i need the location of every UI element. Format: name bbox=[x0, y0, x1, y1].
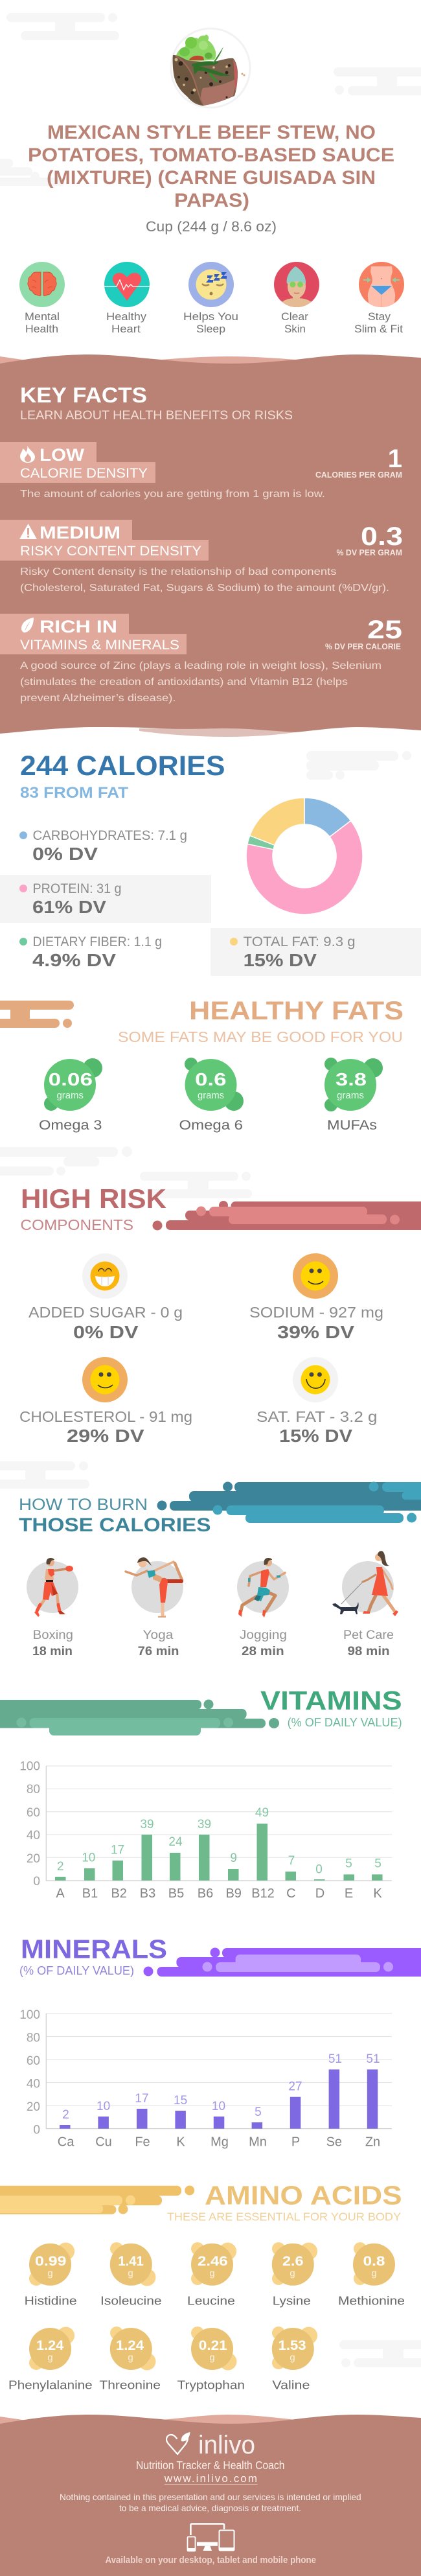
title: POTATOES, TOMATO-BASED SAUCE bbox=[28, 145, 394, 166]
benefit labels: Helps You bbox=[183, 310, 238, 323]
amino: tryptophan: g bbox=[209, 2352, 215, 2363]
bar chart: vitamins: 24 bbox=[168, 1835, 183, 1849]
benefit labels: Sleep bbox=[196, 323, 225, 335]
macro: protein: PROTEIN: 31 g bbox=[32, 881, 122, 896]
risk: saturated fat bbox=[256, 1357, 377, 1446]
minerals subheading: (% OF DAILY VALUE) bbox=[19, 1964, 134, 1977]
activity: pet care bbox=[332, 1551, 398, 1658]
bar chart: minerals: P bbox=[291, 2135, 300, 2150]
risk: saturated fat: 15% DV bbox=[279, 1426, 352, 1446]
activity: jogging: Jogging bbox=[240, 1629, 287, 1642]
amino: threonine: 1.24 bbox=[116, 2338, 144, 2353]
fat: omega 6: 0.6 bbox=[195, 1069, 227, 1089]
fat: omega 3: 0.06 bbox=[49, 1069, 93, 1089]
title: (MIXTURE) (CARNE GUISADA SIN bbox=[47, 167, 376, 189]
bar chart: vitamins: 2 bbox=[57, 1860, 64, 1874]
bar chart: minerals: 5 bbox=[255, 2106, 262, 2119]
risk: sodium: SODIUM - 927 mg bbox=[249, 1304, 383, 1321]
healthy fats heading: HEALTHY FATS bbox=[189, 997, 404, 1025]
serving size: Cup (244 g / 8.6 oz) bbox=[146, 218, 277, 235]
fact: rich in vitamins and minerals: A good source of Zinc (plays a leading role in weight loss), Selenium bbox=[20, 660, 381, 671]
bar chart: minerals: Zn bbox=[365, 2135, 380, 2150]
icon: devices bbox=[187, 2524, 234, 2551]
amino: threonine: Threonine bbox=[99, 2378, 161, 2392]
minerals heading: MINERALS bbox=[21, 1934, 167, 1964]
icon: sleep bbox=[188, 262, 234, 307]
amino acids subheading: THESE ARE ESSENTIAL FOR YOUR BODY bbox=[167, 2210, 401, 2223]
availability note: Available on your desktop, tablet and mobile phone bbox=[105, 2555, 316, 2566]
fact: risky content density: 0.3 bbox=[361, 522, 403, 551]
amino: leucine: 2.46 bbox=[198, 2254, 228, 2269]
benefit labels: Healthy bbox=[106, 310, 147, 323]
fact: risky content density: Risky Content density is the relationship of bad components bbox=[20, 566, 337, 577]
amino: valine: Valine bbox=[272, 2378, 310, 2392]
icon: slim and fit bbox=[359, 262, 404, 308]
activity: yoga: 76 min bbox=[138, 1645, 179, 1658]
vitamins heading: VITAMINS bbox=[260, 1686, 402, 1715]
activity: pet care: Pet Care bbox=[343, 1629, 394, 1642]
fact: rich in vitamins and minerals: RICH IN bbox=[40, 617, 117, 636]
fat: mufas: MUFAs bbox=[327, 1118, 377, 1133]
bar chart: vitamins: 5 bbox=[345, 1857, 352, 1871]
amino: valine: 1.53 bbox=[279, 2338, 306, 2353]
healthy fats subheading: SOME FATS MAY BE GOOD FOR YOU bbox=[118, 1028, 403, 1045]
risk: added sugar bbox=[28, 1253, 183, 1342]
amino: threonine: g bbox=[128, 2352, 133, 2363]
food photo: beef stew bbox=[171, 29, 250, 108]
bar chart: vitamins: B1 bbox=[82, 1886, 98, 1901]
fat: omega 3: grams bbox=[57, 1090, 84, 1101]
amino: valine: g bbox=[290, 2352, 295, 2363]
bar chart: vitamins: E bbox=[345, 1886, 353, 1901]
high risk decoration bbox=[153, 1201, 421, 1230]
bar chart: vitamins: C bbox=[286, 1886, 296, 1901]
bar chart: vitamins: B12 bbox=[251, 1886, 275, 1901]
bar chart: vitamins: D bbox=[315, 1886, 324, 1901]
benefit labels: Skin bbox=[284, 323, 306, 335]
macro: dietary fiber: 4.9% DV bbox=[32, 950, 116, 970]
macro: carbohydrates bbox=[19, 828, 187, 864]
macro: protein bbox=[0, 875, 211, 923]
disclaimer: to be a medical advice, diagnosis or treatment. bbox=[119, 2503, 301, 2513]
panel: footer bbox=[0, 2415, 421, 2576]
amino: phenylalanine: g bbox=[47, 2352, 53, 2363]
amino: leucine: Leucine bbox=[187, 2294, 235, 2308]
amino: tryptophan: Tryptophan bbox=[177, 2378, 245, 2392]
amino: histidine: 0.99 bbox=[35, 2254, 66, 2269]
burn calories decoration bbox=[157, 1481, 421, 1523]
fact: rich in vitamins and minerals: % DV PER CALORIE bbox=[325, 642, 401, 651]
risk: sodium: 39% DV bbox=[277, 1322, 354, 1342]
benefit labels: Health bbox=[25, 323, 58, 335]
activity: jogging: 28 min bbox=[242, 1645, 284, 1658]
burn calories heading: HOW TO BURN bbox=[19, 1496, 148, 1514]
disclaimer: Nothing contained in this presentation and our services is intended or implied bbox=[60, 2492, 361, 2502]
donut chart bbox=[246, 798, 363, 914]
activity: boxing bbox=[27, 1558, 78, 1658]
bar chart: vitamins: 17 bbox=[111, 1844, 124, 1857]
logo: inlivo: inlivo bbox=[198, 2431, 255, 2459]
bar chart: vitamins: K bbox=[373, 1886, 382, 1901]
icon: clear skin bbox=[274, 262, 319, 307]
bar chart: vitamins: B5 bbox=[168, 1886, 184, 1901]
calories heading: 244 CALORIES bbox=[20, 750, 225, 782]
bar chart: minerals: 60 bbox=[27, 2054, 40, 2068]
bar chart: minerals: 40 bbox=[27, 2078, 40, 2091]
bar chart: minerals: K bbox=[176, 2135, 185, 2150]
benefit labels: Slim & Fit bbox=[354, 323, 403, 335]
fact: risky content density: (Cholesterol, Saturated Fat, Sugars & Sodium) to the amount (%DV/gr). bbox=[20, 583, 389, 594]
fat: mufas: 3.8 bbox=[336, 1069, 367, 1089]
bar chart: vitamins: 5 bbox=[374, 1857, 381, 1871]
bar chart: minerals: Ca bbox=[58, 2135, 74, 2150]
fact: calorie density: CALORIE DENSITY bbox=[20, 466, 148, 481]
risk: added sugar: 0% DV bbox=[73, 1322, 139, 1342]
bar chart: minerals: 10 bbox=[212, 2100, 225, 2113]
amino: lysine: g bbox=[290, 2268, 295, 2279]
macro: dietary fiber: DIETARY FIBER: 1.1 g bbox=[32, 934, 162, 949]
amino: methionine: 0.8 bbox=[363, 2254, 385, 2269]
title bbox=[28, 122, 394, 211]
fat: mufas: grams bbox=[337, 1090, 364, 1101]
macro: total fat bbox=[210, 928, 421, 976]
icon: healthy heart bbox=[104, 262, 150, 307]
title: PAPAS) bbox=[174, 190, 249, 211]
amino acids heading: AMINO ACIDS bbox=[205, 2181, 402, 2210]
amino: methionine bbox=[338, 2242, 405, 2308]
benefit labels: Mental bbox=[25, 310, 60, 323]
amino: threonine bbox=[99, 2327, 161, 2392]
bar chart: minerals: 100 bbox=[19, 2008, 40, 2022]
disclaimer bbox=[60, 2492, 361, 2513]
key facts subheading: LEARN ABOUT HEALTH BENEFITS OR RISKS bbox=[20, 409, 293, 423]
fact: rich in vitamins and minerals bbox=[0, 614, 402, 704]
key facts heading: KEY FACTS bbox=[20, 383, 147, 407]
bar chart: minerals: 10 bbox=[97, 2100, 110, 2113]
bar chart: vitamins: 39 bbox=[198, 1818, 211, 1831]
bar chart: vitamins: B2 bbox=[111, 1886, 127, 1901]
bar chart: vitamins: B3 bbox=[140, 1886, 155, 1901]
icon: mental health bbox=[19, 262, 65, 307]
bar chart: minerals: 17 bbox=[135, 2092, 149, 2106]
activity: yoga: Yoga bbox=[142, 1629, 174, 1642]
bar chart: vitamins: B6 bbox=[198, 1886, 213, 1901]
from fat subheading: 83 FROM FAT bbox=[20, 784, 128, 802]
bar chart: vitamins: B9 bbox=[225, 1886, 242, 1901]
amino: isoleucine bbox=[100, 2242, 162, 2308]
risk: cholesterol: CHOLESTEROL - 91 mg bbox=[19, 1408, 192, 1425]
risk: sodium bbox=[249, 1253, 383, 1342]
risk: cholesterol bbox=[19, 1357, 192, 1446]
fact: risky content density: % DV PER GRAM bbox=[337, 548, 402, 557]
bar chart: vitamins: A bbox=[56, 1886, 65, 1901]
activity: jogging bbox=[237, 1558, 289, 1658]
high risk subheading: COMPONENTS bbox=[21, 1216, 133, 1233]
icon: warning triangle bbox=[19, 524, 37, 539]
benefit labels bbox=[25, 310, 403, 335]
macro: total fat: TOTAL FAT: 9.3 g bbox=[244, 934, 356, 949]
burn calories heading bbox=[19, 1496, 211, 1536]
bar chart: vitamins: 0 bbox=[315, 1863, 323, 1877]
bar chart: vitamins: 40 bbox=[27, 1829, 40, 1842]
macro: total fat: 15% DV bbox=[244, 950, 317, 970]
title: MEXICAN STYLE BEEF STEW, NO bbox=[47, 122, 376, 143]
benefit labels: Heart bbox=[111, 323, 141, 335]
fat: mufas bbox=[324, 1058, 383, 1133]
macro: dietary fiber bbox=[19, 934, 162, 970]
amino: methionine: Methionine bbox=[338, 2294, 405, 2308]
bar chart: minerals: 27 bbox=[288, 2080, 302, 2094]
bar chart: vitamins bbox=[19, 1760, 392, 1901]
fact: risky content density: RISKY CONTENT DENSITY bbox=[20, 544, 201, 559]
fat: omega 6: Omega 6 bbox=[179, 1118, 243, 1133]
bar chart: vitamins: 60 bbox=[27, 1806, 40, 1820]
risk: added sugar: ADDED SUGAR - 0 g bbox=[28, 1304, 183, 1321]
bar chart: minerals: Fe bbox=[135, 2135, 150, 2150]
amino: isoleucine: g bbox=[128, 2268, 133, 2279]
bar chart: vitamins: 7 bbox=[288, 1854, 295, 1868]
bar chart: minerals: Cu bbox=[95, 2135, 112, 2150]
fat: omega 3: Omega 3 bbox=[39, 1118, 102, 1133]
risk: saturated fat: SAT. FAT - 3.2 g bbox=[256, 1408, 377, 1425]
amino: histidine: g bbox=[47, 2268, 53, 2279]
bar chart: vitamins: 10 bbox=[82, 1851, 95, 1865]
amino acids decoration bbox=[0, 2185, 194, 2214]
benefit labels: Clear bbox=[281, 310, 308, 323]
icon: flame bbox=[20, 445, 35, 463]
fact: calorie density: CALORIES PER GRAM bbox=[315, 470, 402, 480]
panel: key facts bbox=[0, 354, 421, 737]
amino: isoleucine: 1.41 bbox=[118, 2254, 144, 2269]
bar chart: vitamins: 100 bbox=[19, 1760, 40, 1774]
amino: phenylalanine: Phenylalanine bbox=[8, 2378, 93, 2392]
activity: boxing: Boxing bbox=[33, 1629, 73, 1642]
tagline: Nutrition Tracker & Health Coach bbox=[136, 2459, 285, 2472]
bar chart: minerals: 51 bbox=[328, 2052, 342, 2066]
fact: calorie density: 1 bbox=[388, 445, 402, 473]
amino: tryptophan bbox=[177, 2327, 245, 2392]
amino: lysine: 2.6 bbox=[282, 2254, 303, 2269]
bar chart: vitamins: 20 bbox=[27, 1852, 40, 1866]
bar chart: vitamins: 9 bbox=[230, 1851, 237, 1865]
macro: carbohydrates: 0% DV bbox=[32, 844, 98, 864]
amino: phenylalanine: 1.24 bbox=[36, 2338, 64, 2353]
amino: histidine bbox=[25, 2242, 77, 2308]
fat: omega 6 bbox=[179, 1058, 244, 1133]
benefit labels: Stay bbox=[368, 310, 391, 323]
logo: inlivo bbox=[166, 2431, 255, 2459]
fact: rich in vitamins and minerals: 25 bbox=[367, 616, 402, 644]
fact: calorie density bbox=[0, 442, 402, 500]
bar chart: vitamins: 39 bbox=[140, 1818, 154, 1831]
burn calories heading: THOSE CALORIES bbox=[19, 1514, 211, 1536]
activity: yoga bbox=[126, 1557, 183, 1658]
vitamins decoration bbox=[0, 1699, 279, 1735]
amino: lysine: Lysine bbox=[273, 2294, 311, 2308]
fact: calorie density: The amount of calories you are getting from 1 gram is low. bbox=[20, 489, 325, 500]
fat: omega 6: grams bbox=[198, 1090, 224, 1101]
fact: risky content density: MEDIUM bbox=[40, 523, 120, 542]
fact: risky content density bbox=[0, 520, 403, 594]
bar chart: vitamins: 49 bbox=[255, 1806, 269, 1820]
bar chart: minerals: Mg bbox=[210, 2135, 229, 2150]
fact: rich in vitamins and minerals: prevent Alzheimer’s disease). bbox=[20, 693, 176, 704]
amino: methionine: g bbox=[371, 2268, 377, 2279]
amino: tryptophan: 0.21 bbox=[199, 2338, 227, 2353]
bar chart: minerals: 2 bbox=[62, 2108, 69, 2122]
bar chart: minerals bbox=[19, 2008, 392, 2150]
fact: calorie density: LOW bbox=[40, 445, 85, 465]
minerals decoration bbox=[144, 1948, 421, 1977]
amino: histidine: Histidine bbox=[25, 2294, 77, 2308]
fact: rich in vitamins and minerals: VITAMINS & MINERALS bbox=[20, 638, 179, 653]
health benefits icons bbox=[19, 262, 404, 308]
bar chart: minerals: 20 bbox=[27, 2100, 40, 2114]
bar chart: vitamins: 0 bbox=[33, 1875, 40, 1888]
bar chart: minerals: Mn bbox=[249, 2135, 267, 2150]
bar chart: minerals: 15 bbox=[174, 2094, 187, 2107]
bar chart: minerals: 0 bbox=[33, 2124, 40, 2137]
risk: cholesterol: 29% DV bbox=[67, 1426, 144, 1446]
bar chart: vitamins: 80 bbox=[27, 1783, 40, 1796]
bar chart: minerals: 80 bbox=[27, 2032, 40, 2045]
amino: phenylalanine bbox=[8, 2327, 93, 2392]
healthy fats decoration bbox=[0, 1001, 74, 1028]
amino: leucine: g bbox=[209, 2268, 215, 2279]
activity: pet care: 98 min bbox=[347, 1645, 390, 1658]
fat: omega 3 bbox=[39, 1058, 102, 1133]
activity: boxing: 18 min bbox=[32, 1645, 73, 1658]
macro: carbohydrates: CARBOHYDRATES: 7.1 g bbox=[32, 828, 187, 843]
high risk heading: HIGH RISK bbox=[21, 1183, 166, 1214]
bar chart: minerals: 51 bbox=[366, 2052, 380, 2066]
amino: isoleucine: Isoleucine bbox=[100, 2294, 162, 2308]
website link: www.inlivo.com bbox=[164, 2472, 257, 2485]
macro: protein: 61% DV bbox=[32, 897, 106, 917]
amino: valine bbox=[272, 2327, 317, 2392]
bar chart: minerals: Se bbox=[326, 2135, 342, 2150]
icon: leaf bbox=[21, 618, 34, 632]
fact: rich in vitamins and minerals: (stimulates the creation of antioxidants) and Vitamin B12 (helps bbox=[20, 677, 348, 688]
amino: lysine bbox=[272, 2242, 317, 2308]
vitamins subheading: (% OF DAILY VALUE) bbox=[288, 1716, 402, 1729]
amino: leucine bbox=[187, 2242, 236, 2308]
